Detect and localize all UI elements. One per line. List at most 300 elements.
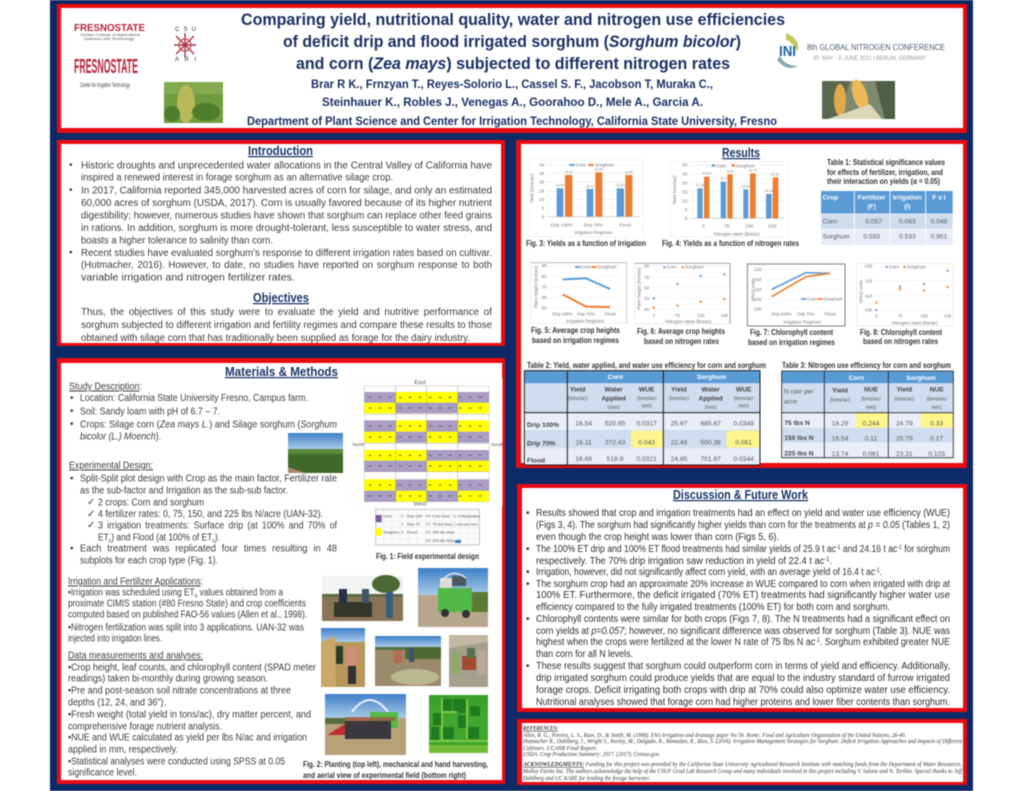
figure 4: yield by nitrogen bar chart: 15 xyxy=(682,189,688,194)
logo: CSU ARI xyxy=(174,27,196,63)
figure 1 legend: F2 xyxy=(426,529,431,534)
figure 3: yield by irrigation bar chart: Flood xyxy=(619,222,631,227)
table 1: statistical significance: Fertilizer xyxy=(858,194,886,201)
introduction bullet text: digestibility; however, numerous studies have shown that sorghum can replace other feed grains xyxy=(81,210,492,222)
figure 1 legend: 3 xyxy=(401,529,404,534)
table 2: yield, water applied and WUE: mm) xyxy=(642,404,652,410)
table 2: yield, water applied and WUE: 16.69 xyxy=(575,456,592,463)
experimental design: c xyxy=(212,538,215,544)
figure 4: yield by nitrogen bar chart: 5 xyxy=(685,207,688,212)
figure 1 legend: Drip 100 xyxy=(407,514,423,519)
table 2: yield, water applied and WUE: (tons/ac) xyxy=(669,396,689,402)
caption: figure 8 xyxy=(860,328,942,346)
table 2: yield, water applied and WUE: WUE xyxy=(639,386,655,393)
table 1: statistical significance: F x I xyxy=(932,194,946,201)
discussion bullet text: The 100% ET drip and 100% ET flood treatments had similar yields of 25.9 t ac xyxy=(536,544,886,555)
study description: • xyxy=(70,419,74,430)
caption: figure 1: Fig. 1: Field experimental design xyxy=(376,552,479,561)
figure 3: yield by irrigation bar chart: Corn xyxy=(576,163,586,168)
table 3: nitrogen use efficiency: acre xyxy=(784,398,797,405)
table 3: nitrogen use efficiency: 23.31 xyxy=(896,451,913,458)
introduction bullet text: Historic droughts and unprecedented water allocations in the Central Valley of California have xyxy=(81,160,492,172)
data measurements and analyses: Data measurements and analyses: xyxy=(68,650,203,662)
table 2: yield, water applied and WUE: Yield xyxy=(570,386,586,393)
data measurements and analyses: comprehensive forage nutrient analysis. xyxy=(68,722,222,732)
figure 8: chlorophyll by nitrogen scatter chart: SPAD units xyxy=(858,279,863,303)
study description: • xyxy=(70,406,74,417)
discussion bullet text: efficiency compared to the fully irrigated treatments (100% ET) for both corn and sorghum. xyxy=(536,602,890,613)
figure 6: crop height by nitrogen scatter chart: 60 xyxy=(644,285,650,290)
logo: Fresno State Jordan College: Sciences and Technology xyxy=(84,36,134,41)
caption: figure 7: based on irrigation regimes xyxy=(748,338,835,347)
figure 3: yield by irrigation bar chart: 16.69 xyxy=(616,184,625,188)
table 2: yield, water applied and WUE: (mm) xyxy=(705,405,717,411)
figure 5: crop height by irrigation line chart: Flood xyxy=(605,312,616,317)
study description: • xyxy=(70,393,74,404)
figure 1 legend: 150 lbs N/ac xyxy=(432,529,454,534)
discussion bullet text: • xyxy=(526,508,530,519)
discussion bullet text: forage crops. Deficit irrigating both crops with drip at 70% could also optimize water use efficiency. xyxy=(536,685,950,696)
discussion bullet text: highest when the crops were fertilized at the lower N rate of 75 lbs N ac xyxy=(536,637,852,648)
experimental design: ✓ xyxy=(87,520,95,531)
table 2: yield, water applied and WUE: Applied xyxy=(698,396,723,403)
figure 8: chlorophyll by nitrogen scatter chart: 115 xyxy=(865,279,873,284)
data measurements and analyses: •Crop height, leaf counts, and chlorophyll content (SPAD meter xyxy=(68,662,317,674)
figure 3: yield by irrigation bar chart xyxy=(529,160,643,237)
table 3: nitrogen use efficiency: Yield xyxy=(896,387,912,394)
figure 8: chlorophyll by nitrogen scatter chart: Corn xyxy=(889,265,899,270)
discussion bullet text: The sorghum crop had an approximate 20% increase in WUE compared to corn when irrigated with drip at xyxy=(536,579,950,590)
caption: figure 6: Fig. 6: Average crop heights xyxy=(637,327,725,336)
caption: figure 3: Fig. 3: Yields as a function of irrigation xyxy=(526,239,646,248)
table 1: statistical significance: 0.048 xyxy=(931,218,948,225)
table 2: yield, water applied and WUE: 0.0321 xyxy=(636,456,657,463)
figure 6: crop height by nitrogen scatter chart: 70 xyxy=(644,275,650,280)
figure 2: field photographs xyxy=(321,568,488,755)
photo: aerial view of field xyxy=(429,695,488,753)
figure 6: crop height by nitrogen scatter chart xyxy=(635,263,730,324)
discussion bullet text: These results suggest that sorghum could outperform corn in terms of yield and efficiency. Additionally, xyxy=(536,661,950,672)
figure 1: field experimental design: West xyxy=(414,502,427,508)
introduction bullet text xyxy=(69,160,492,284)
figure 6: crop height by nitrogen scatter chart: Plant height (inches) xyxy=(636,267,641,310)
table 3: nitrogen use efficiency: 0.33 xyxy=(930,420,943,427)
experimental design: ✓ xyxy=(87,497,95,508)
discussion bullet text: Results showed that crop and irrigation treatments had an effect on yield and water use efficiency (WUE) xyxy=(536,508,950,519)
logo: Fresno State Center for Irrigation Technology xyxy=(74,56,138,89)
figure 8: chlorophyll by nitrogen scatter chart: 105 xyxy=(865,308,873,313)
table 3: nitrogen use efficiency: 150 lbs N xyxy=(784,435,814,442)
table 2: yield, water applied and WUE: Corn xyxy=(608,374,623,381)
figure 7: chlorophyll by irrigation line chart xyxy=(747,264,845,326)
figure 3: yield by irrigation bar chart: 25.97 xyxy=(564,170,573,174)
discussion bullet text: 100% ET. Furthermore, the deficit irrigated (70% ET) treatments had significantly higher water use xyxy=(536,590,950,601)
figure 3: yield by irrigation bar chart: 25 xyxy=(539,171,545,176)
discussion bullet text: -1 xyxy=(815,638,820,644)
discussion bullet text: -1 xyxy=(875,568,880,574)
irrigation and fertilizer applications: •Nitrogen fertilization was split into 3 applications. UAN-32 was xyxy=(68,622,304,634)
figure 5: crop height by irrigation line chart: 50 xyxy=(541,306,547,311)
discussion bullet text: . xyxy=(880,567,882,578)
photo: sorghum field xyxy=(288,433,343,473)
figure 8: chlorophyll by nitrogen scatter chart: Nitrogen rates (lbs/ac) xyxy=(892,320,938,325)
discussion bullet text: (Figs 3, 4). The sorghum had significantly higher yields than corn for the treatments at p = 0.05 (Tables 1, 2) xyxy=(536,520,950,531)
acknowledgments text: Dahlberg and UC KARE for lending the forage harvester. xyxy=(522,775,650,782)
data measurements and analyses: •Statistical analyses were conducted using SPSS at 0.05 xyxy=(68,756,285,768)
title: and corn (Zea mays) subjected to different nitrogen rates xyxy=(296,55,730,73)
table 3: nitrogen use efficiency: NUE xyxy=(864,387,879,394)
table 2: yield, water applied and WUE: 518.9 xyxy=(607,456,624,463)
figure 8: chlorophyll by nitrogen scatter chart: 225 xyxy=(944,314,952,319)
photo: hand harvest in corn xyxy=(321,628,365,687)
table 2: yield, water applied and WUE: 0.0349 xyxy=(733,420,754,427)
table 2: yield, water applied and WUE: (mm) xyxy=(608,405,620,411)
references text: Cultivars. UCANR Final Report. xyxy=(523,746,597,752)
table 1: statistical significance: Corn xyxy=(823,218,837,225)
experimental design: Each treatment was replicated four times resulting in 48 xyxy=(80,544,337,554)
table 3: nitrogen use efficiency: 0.17 xyxy=(930,436,943,443)
experimental design: Experimental Design: xyxy=(69,460,153,472)
caption: figure 8: Fig. 8: Chlorophyll content xyxy=(860,328,942,337)
figure 1 legend: F0 xyxy=(426,514,431,519)
table 3: nitrogen use efficiency: 24.79 xyxy=(896,420,913,427)
photo: planting xyxy=(322,575,403,621)
table 2: yield, water applied and WUE: (tons/ac) xyxy=(568,396,588,402)
logo: Fresno State Jordan College xyxy=(74,23,145,41)
data measurements and analyses: depths (12, 24, and 36"). xyxy=(68,698,166,708)
discussion bullet text: • xyxy=(526,614,530,625)
table 2: yield, water applied and WUE: 520.95 xyxy=(605,420,625,427)
figure 3: yield by irrigation bar chart: Yield (tons/ac) xyxy=(529,173,534,203)
study description: Crops: Silage corn (Zea mays L.) and Silage sorghum (Sorghum xyxy=(80,420,337,430)
caption: figure 2: and aerial view of experimental field (bottom right) xyxy=(303,771,466,780)
discussion bullet text: corn yields at p=0.057; however, no significant difference was observed for sorghum (Table 3). NUE was xyxy=(536,626,950,637)
table 2: yield, water applied and WUE: Flood xyxy=(527,457,545,464)
introduction bullet text: In 2017, California reported 345,000 harvested acres of corn for silage, and only an estimated xyxy=(81,186,492,196)
figure 1 legend: 1 xyxy=(401,514,404,519)
data measurements and analyses: •Pre and post-season soil nitrate concentrations at three xyxy=(68,686,291,696)
figure 4: yield by nitrogen bar chart: 13.74 xyxy=(764,189,773,193)
figure 4: yield by nitrogen bar chart: 150 xyxy=(745,223,754,229)
figure 4: yield by nitrogen bar chart: 23.60 xyxy=(702,172,711,176)
table 1: statistical significance: Crop xyxy=(823,194,838,201)
figure 1 legend: Drip 70 xyxy=(407,521,421,526)
caption: figure 6: based on nitrogen rates xyxy=(644,337,719,346)
table 2: yield, water applied and WUE: 0.043 xyxy=(638,439,655,446)
figure 6: crop height by nitrogen scatter chart: 50 xyxy=(644,296,650,301)
figure 4: yield by nitrogen bar chart xyxy=(670,162,788,237)
table 2: yield, water applied and WUE: Water xyxy=(605,386,623,393)
logo: INI: INI xyxy=(779,43,796,60)
introduction bullet text: boasts a higher tolerance to salinity than corn. xyxy=(81,236,273,246)
figure 8: chlorophyll by nitrogen scatter chart: 150 xyxy=(920,314,928,319)
irrigation and fertilizer applications: proximate CIMIS station (#80 Fresno State) and crop coefficients xyxy=(68,598,306,610)
figure 8: chlorophyll by nitrogen scatter chart: 75 xyxy=(898,314,903,319)
table 2: yield, water applied and WUE: 685.67 xyxy=(700,420,721,427)
table 1: statistical significance: Sorghum xyxy=(823,234,850,241)
table 1: statistical significance xyxy=(821,191,953,245)
experimental design: 2 crops: Corn and sorghum xyxy=(98,498,204,508)
figure 4: yield by nitrogen bar chart: Nitrogen rates (lbs/ac) xyxy=(714,231,760,236)
logo: CSU ARI: A R I xyxy=(175,57,196,63)
figure 8: chlorophyll by nitrogen scatter chart: Sorghum xyxy=(907,265,926,270)
table 3: nitrogen use efficiency: 75 lbs N xyxy=(784,420,810,427)
discussion bullet text: • xyxy=(526,567,530,578)
figure 6: crop height by nitrogen scatter chart: 150 xyxy=(697,313,705,318)
authors: Brar R K., Frnzyan T., Reyes-Solorio L., Cassel S. F., Jacobson T, Muraka C., xyxy=(311,77,713,91)
table 1: statistical significance: Irrigation xyxy=(893,194,922,201)
figure 4: yield by nitrogen bar chart: Corn xyxy=(716,163,727,168)
figure 3: yield by irrigation bar chart: 24.85 xyxy=(624,170,633,174)
table 3: nitrogen use efficiency: 225 lbs N xyxy=(784,450,814,457)
irrigation and fertilizer applications: computed based on published FAO-56 values (Allen et al., 1998). xyxy=(68,610,307,620)
introduction bullet text: variable irrigation and nitrogen fertilizer rates. xyxy=(81,272,295,284)
figure 8: chlorophyll by nitrogen scatter chart: 110 xyxy=(865,293,873,298)
table 2: yield, water applied and WUE: (tons/ac/ xyxy=(734,396,754,402)
discussion bullet text: . Sorghum exhibited greater NUE xyxy=(820,637,950,648)
figure 3: yield by irrigation bar chart: Irrigation Regimes xyxy=(574,230,613,235)
study description xyxy=(69,382,337,442)
figure 5: crop height by irrigation line chart: Corn xyxy=(581,265,592,270)
logo: INI xyxy=(777,33,798,68)
experimental design: as the sub-factor and Irrigation as the sub-sub factor. xyxy=(80,486,288,496)
references text: Allen, R. G., Pereira, L. S., Raes, D., & Smith, M. (1998). FAO Irrigation and drainage paper No 56. Rome: Food and Agriculture Organization of the United Nations, 26-40. xyxy=(522,732,906,739)
figure 3: yield by irrigation bar chart: 20 xyxy=(539,180,545,185)
table 3: nitrogen use efficiency: NUE xyxy=(930,387,944,394)
discussion bullet text: Irrigation, however, did not significantly affect corn yield, with an average yield of 16.4 t ac xyxy=(536,567,932,578)
study description: Location: California State University Fresno, Campus farm. xyxy=(80,393,308,404)
panel: title header xyxy=(57,4,967,133)
caption: figure 2 xyxy=(303,760,488,780)
table 2: yield, water applied and WUE: 24.85 xyxy=(671,456,688,463)
title: of deficit drip and flood irrigated sorghum (Sorghum bicolor) xyxy=(283,33,741,51)
heading: results: Results xyxy=(722,146,760,160)
introduction bullet text: • xyxy=(69,185,73,196)
caption: figure 6 xyxy=(637,327,725,346)
table 3: nitrogen use efficiency: 25.79 xyxy=(896,436,913,443)
table 3: nitrogen use efficiency: Corn xyxy=(849,375,864,382)
table 2: yield, water applied and WUE: Applied xyxy=(601,396,626,403)
authors xyxy=(311,77,713,109)
introduction bullet text: 60,000 acres of sorghum (USDA, 2017). Corn is usually favored because of its higher nutrient xyxy=(81,198,492,209)
irrigation and fertilizer applications: Irrigation and Fertilizer Applications: xyxy=(68,576,203,588)
logo: Fresno State Center for Irrigation Technology: Center for Irrigation Technology xyxy=(80,83,130,89)
discussion bullet text: Nutritional analyses showed that forage corn had higher proteins and lower fiber contents than sorghum. xyxy=(536,697,950,708)
figure 5: crop height by irrigation line chart: Drip 100% xyxy=(553,312,573,317)
table 1 title xyxy=(827,158,945,186)
experimental design: ). xyxy=(215,532,220,544)
table 3: nitrogen use efficiency: mm) xyxy=(866,405,876,411)
figure 4: yield by nitrogen bar chart: 18.3 xyxy=(720,177,727,181)
table 3: nitrogen use efficiency: 0.11 xyxy=(865,436,878,443)
figure 4: yield by nitrogen bar chart: 23.31 xyxy=(771,172,780,176)
data measurements and analyses: applied in mm, respectively. xyxy=(68,744,178,756)
table 2: yield, water applied and WUE: 0.051 xyxy=(735,439,752,446)
figure 7: chlorophyll by irrigation line chart: Flood xyxy=(825,312,836,317)
table 3: nitrogen use efficiency: 0.103 xyxy=(928,451,945,458)
experimental design: ✓ xyxy=(87,509,95,520)
figure 5: crop height by irrigation line chart: Drip 70% xyxy=(577,312,595,317)
objectives text: obtained with silage corn that has traditionally been supplied as forage for the dairy industry. xyxy=(81,333,470,344)
figure 3: yield by irrigation bar chart: 5 xyxy=(542,206,545,211)
figure 3: yield by irrigation bar chart: Drip 70% xyxy=(584,222,603,227)
figure 5: crop height by irrigation line chart: 90 xyxy=(541,263,547,268)
figure 1 legend: Flood xyxy=(407,529,417,534)
table 3: nitrogen use efficiency: 0.244 xyxy=(863,420,880,427)
table 2: yield, water applied and WUE: Yield xyxy=(671,386,687,393)
figure 7: chlorophyll by irrigation line chart: 120 xyxy=(754,267,762,272)
experimental design: ) and Flood (at 100% of ET xyxy=(111,532,212,544)
acknowledgments text xyxy=(522,761,963,782)
figure 1 legend: Corn xyxy=(383,514,392,519)
figure 5: crop height by irrigation line chart: Irrigation Regimes xyxy=(566,318,605,323)
experimental design: • xyxy=(70,544,74,554)
figure 1 legend: 1: 4 Replicates xyxy=(453,514,480,519)
logo: Fresno State Jordan College: Jordan College of Agricultural xyxy=(80,32,140,37)
conference name: 30. MAY - 3. JUNE 2021 | BERLIN, GERMANY xyxy=(813,56,926,62)
figure 7: chlorophyll by irrigation line chart: Drip 100% xyxy=(772,312,792,317)
caption: figure 5: Fig. 5: Average crop heights xyxy=(531,326,620,335)
figure 6: crop height by nitrogen scatter chart: Sorghum xyxy=(685,265,704,270)
figure 4: yield by nitrogen bar chart: Sorghum xyxy=(736,163,755,168)
introduction bullet text: in rations. In addition, sorghum is more drought-tolerant, less susceptible to water stress, and xyxy=(81,223,492,234)
table 2: yield, water applied and WUE: WUE xyxy=(736,386,752,393)
figure 4: yield by nitrogen bar chart: 30 xyxy=(682,163,688,168)
figure 8: chlorophyll by nitrogen scatter chart xyxy=(857,263,953,326)
figure 1 legend: Sorghum xyxy=(383,529,400,534)
objectives text xyxy=(81,307,492,344)
figure 3: yield by irrigation bar chart: Sorghum xyxy=(595,163,614,168)
experimental design: 3 irrigation treatments: Surface drip (at 100% and 70% of xyxy=(98,520,337,532)
conference name: 8th GLOBAL NITROGEN CONFERENCE xyxy=(807,43,945,52)
table 1: statistical significance: 0.951 xyxy=(931,234,948,241)
figure 3: yield by irrigation bar chart: 15 xyxy=(539,188,545,193)
figure 8: chlorophyll by nitrogen scatter chart: 0 xyxy=(875,314,878,319)
photo: mechanical harvester xyxy=(418,568,488,627)
introduction bullet text: (Hutmacher, 2016). However, to date, no studies have reported on sorghum response to both xyxy=(81,260,492,271)
figure 4: yield by nitrogen bar chart: 25.79 xyxy=(748,168,757,172)
table 2: yield, water applied and WUE: mm) xyxy=(739,404,749,410)
table 3: nitrogen use efficiency: 16.54 xyxy=(832,436,849,443)
discussion bullet text: • xyxy=(526,661,530,672)
acknowledgments text: ACKNOWLEDGMENTS: Funding for this project was provided by the California State University Agricultural Research Institute with matching funds from the Department of Water Resources, xyxy=(522,761,962,768)
table 3 title: Table 3: Nitrogen use efficiency for corn and sorghum xyxy=(782,361,951,370)
discussion bullet text: -1 xyxy=(824,557,830,563)
data measurements and analyses: •NUE and WUE calculated as yield per lbs N/ac and irrigation xyxy=(68,732,307,744)
photo: chopped sorghum xyxy=(375,636,441,686)
figure 4: yield by nitrogen bar chart: 16.54 xyxy=(741,184,750,188)
table 3: nitrogen use efficiency: (tons/ac) xyxy=(894,396,915,402)
conference name xyxy=(807,43,945,62)
figure 4: yield by nitrogen bar chart: 10 xyxy=(682,198,688,203)
figure 1: field experimental design: East xyxy=(414,380,426,386)
table 3: nitrogen use efficiency: 13.74 xyxy=(832,451,849,458)
figure 1: field experimental design xyxy=(352,378,504,508)
discussion bullet text: drip irrigated sorghum could produce yields that are equal to the industry standard of furrow irrigated xyxy=(536,673,950,684)
irrigation and fertilizer applications: o xyxy=(195,594,198,600)
references text xyxy=(522,726,962,758)
figure 3: yield by irrigation bar chart: 16.11 xyxy=(586,184,594,188)
table 2: yield, water applied and WUE xyxy=(524,371,760,465)
title xyxy=(241,11,785,73)
figure 4: yield by nitrogen bar chart: 0 xyxy=(702,223,705,229)
photo: researchers under shade xyxy=(449,635,488,687)
discussion bullet text: for sorghum xyxy=(902,544,950,555)
discussion bullet text: Chlorophyll contents were similar for both crops (Figs 7, 8). The N treatments had a significant effect on xyxy=(536,614,950,625)
discussion bullet text: and 24.16 t ac xyxy=(841,544,897,555)
panel: title header: FRESNOSTATE xyxy=(74,56,138,78)
discussion bullet text: • xyxy=(526,579,530,590)
heading: objectives: Objectives xyxy=(253,291,309,305)
table 2 title: Table 2: Yield, water applied, and water use efficiency for corn and sorghum xyxy=(527,361,766,370)
figure 7: chlorophyll by irrigation line chart: Drip 70% xyxy=(797,312,815,317)
table 3: nitrogen use efficiency: mm) xyxy=(932,405,942,411)
panel: results xyxy=(516,140,967,468)
panel: discussion and future work xyxy=(517,484,967,712)
figure 5: crop height by irrigation line chart xyxy=(531,263,627,323)
figure 3: yield by irrigation bar chart: Drip 100% xyxy=(551,222,573,227)
discussion bullet text: than corn for all N levels. xyxy=(536,649,633,660)
table 1 title: Table 1: Statistical significance values xyxy=(827,158,945,167)
data measurements and analyses: •Fresh weight (total yield in tons/ac), dry matter percent, and xyxy=(68,710,311,720)
photo: sorghum crop xyxy=(164,82,223,123)
table 3: nitrogen use efficiency: (tons/ac) xyxy=(830,397,850,403)
acknowledgments text: Molloy Farms Inc. The authors acknowledge the help of the CSUF Grad Lab Research Group and many individuals involved in this project including V. Salone and N. Toribio. Special thanks to Jeff xyxy=(522,768,963,775)
caption: figure 5: based on irrigation regimes xyxy=(532,336,619,345)
figure 1 legend: 1 row per bed xyxy=(453,521,478,526)
figure 8: chlorophyll by nitrogen scatter chart: 120 xyxy=(865,264,873,269)
table 3: nitrogen use efficiency: Sorghum xyxy=(906,375,936,382)
discussion bullet text: even though the crop height was lower than corn (Figs 5, 6). xyxy=(536,532,779,543)
figure 1: field experimental design: South xyxy=(491,442,504,448)
figure 6: crop height by nitrogen scatter chart: 225 xyxy=(721,313,729,318)
photo: corn ears xyxy=(822,78,895,119)
panel: materials and methods xyxy=(57,358,505,784)
table 2: yield, water applied and WUE: (tons/ac/ xyxy=(637,396,657,402)
table 3: nitrogen use efficiency: (tons/ac/ xyxy=(927,396,947,402)
objectives text: Thus, the objectives of this study were to evaluate the yield and nutritive performance of xyxy=(81,307,492,318)
logo: Fresno State Jordan College: FRESNOSTATE xyxy=(74,23,145,34)
table 2: yield, water applied and WUE: 0.0344 xyxy=(733,456,754,463)
caption: figure 4: Fig. 4: Yields as a function of nitrogen rates xyxy=(662,239,799,248)
figure 5: crop height by irrigation line chart: Sorghum xyxy=(598,265,617,270)
figure 6: crop height by nitrogen scatter chart: Corn xyxy=(667,265,677,270)
figure 1 legend: F3 xyxy=(426,538,431,543)
references text: REFERENCES: xyxy=(522,726,558,732)
heading: materials and methods: Materials & Methods xyxy=(225,365,338,379)
discussion bullet text: -1 xyxy=(897,545,902,551)
figure 5: crop height by irrigation line chart: 60 xyxy=(541,295,547,300)
experimental design: c xyxy=(109,538,111,544)
table 3: nitrogen use efficiency: 0.061 xyxy=(863,451,880,458)
experimental design: 4 fertilizer rates: 0, 75, 150, and 225 lbs N/acre (UAN-32). xyxy=(98,509,323,520)
experimental design: subplots for each crop type (Fig. 1). xyxy=(80,556,218,566)
study description: Study Description: xyxy=(69,382,142,392)
study description: bicolor (L.) Moench). xyxy=(80,432,161,442)
figure 3: yield by irrigation bar chart: 16.54 xyxy=(556,184,564,188)
experimental design: • xyxy=(70,474,74,484)
table 2: yield, water applied and WUE: Sorghum xyxy=(697,374,726,381)
table 1: statistical significance: (F) xyxy=(867,204,876,211)
figure 6: crop height by nitrogen scatter chart: 0 xyxy=(653,313,656,318)
table 3: nitrogen use efficiency: (tons/ac/ xyxy=(861,396,881,402)
caption: figure 7 xyxy=(748,328,835,347)
figure 1 legend: 2 xyxy=(401,521,404,526)
affiliation: Department of Plant Science and Center for Irrigation Technology, California State University, Fresno xyxy=(247,114,777,128)
figure 3: yield by irrigation bar chart: 26.98 xyxy=(594,168,603,172)
figure 6: crop height by nitrogen scatter chart: 75 xyxy=(675,313,680,318)
table 2: yield, water applied and WUE: 16.11 xyxy=(576,439,592,446)
